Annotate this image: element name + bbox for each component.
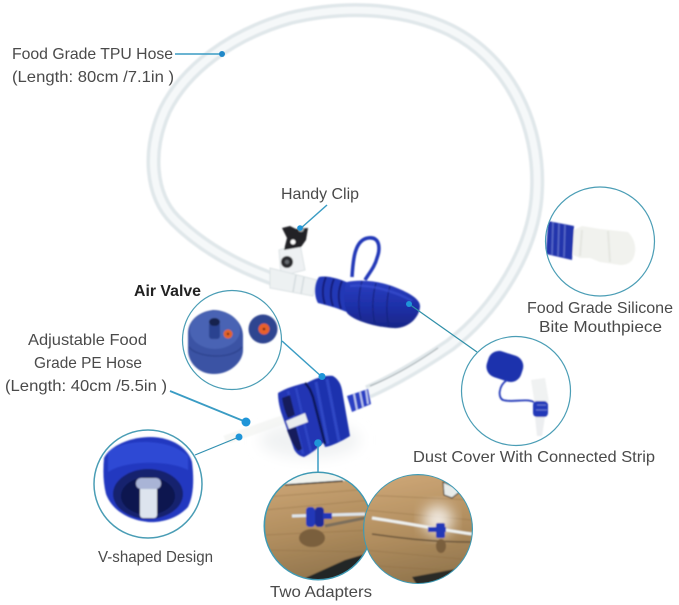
callout: adjustable hose label <box>5 332 250 426</box>
inset: air valve <box>182 290 282 390</box>
callout: adjustable hose label: (Length: 40cm /5.5in ) <box>5 378 167 395</box>
leader line: V-shaped <box>195 434 242 455</box>
product: adjustable PE hose <box>225 414 300 440</box>
label: bite mouthpiece: Bite Mouthpiece <box>539 319 662 336</box>
product: main adapter cap <box>260 376 371 458</box>
callout: handy clip label: Handy Clip <box>281 186 359 203</box>
product: handy clip <box>270 226 317 296</box>
leader line: air valve <box>282 341 326 380</box>
leader line: dust cover <box>406 301 477 352</box>
label: bite mouthpiece <box>527 300 673 336</box>
callout: food grade hose label: Food Grade TPU Hose <box>12 46 173 63</box>
callout: air valve <box>134 283 326 390</box>
label: two adapters: Two Adapters <box>270 584 372 601</box>
inset: bite mouthpiece <box>546 187 654 296</box>
inset: adapter photo right <box>364 475 472 590</box>
inset: V-shaped cap <box>94 430 202 538</box>
callout: adjustable hose label: Adjustable Food <box>28 332 147 349</box>
callout: dust cover <box>406 301 655 466</box>
product: dust cover with strap <box>315 238 420 328</box>
callout: food grade hose label: (Length: 80cm /7.1in ) <box>12 69 174 86</box>
callout: two adapters <box>264 439 472 601</box>
product: food grade TPU hose <box>154 10 537 392</box>
callout: handy clip label <box>281 186 359 231</box>
label: air valve: Air Valve <box>134 283 201 300</box>
callout: bite mouthpiece <box>527 187 673 336</box>
callout: V-shaped design <box>94 430 242 566</box>
callout: adjustable hose label: Grade PE Hose <box>34 355 142 372</box>
inset: dust cover <box>462 336 570 446</box>
label: V-shaped design: V-shaped Design <box>98 549 213 566</box>
label: bite mouthpiece: Food Grade Silicone <box>527 300 673 317</box>
leader line: adapters <box>314 439 322 472</box>
label: dust cover: Dust Cover With Connected Strip <box>413 449 655 466</box>
callout: food grade hose label <box>12 46 225 86</box>
inset: adapter photo left <box>264 472 372 585</box>
